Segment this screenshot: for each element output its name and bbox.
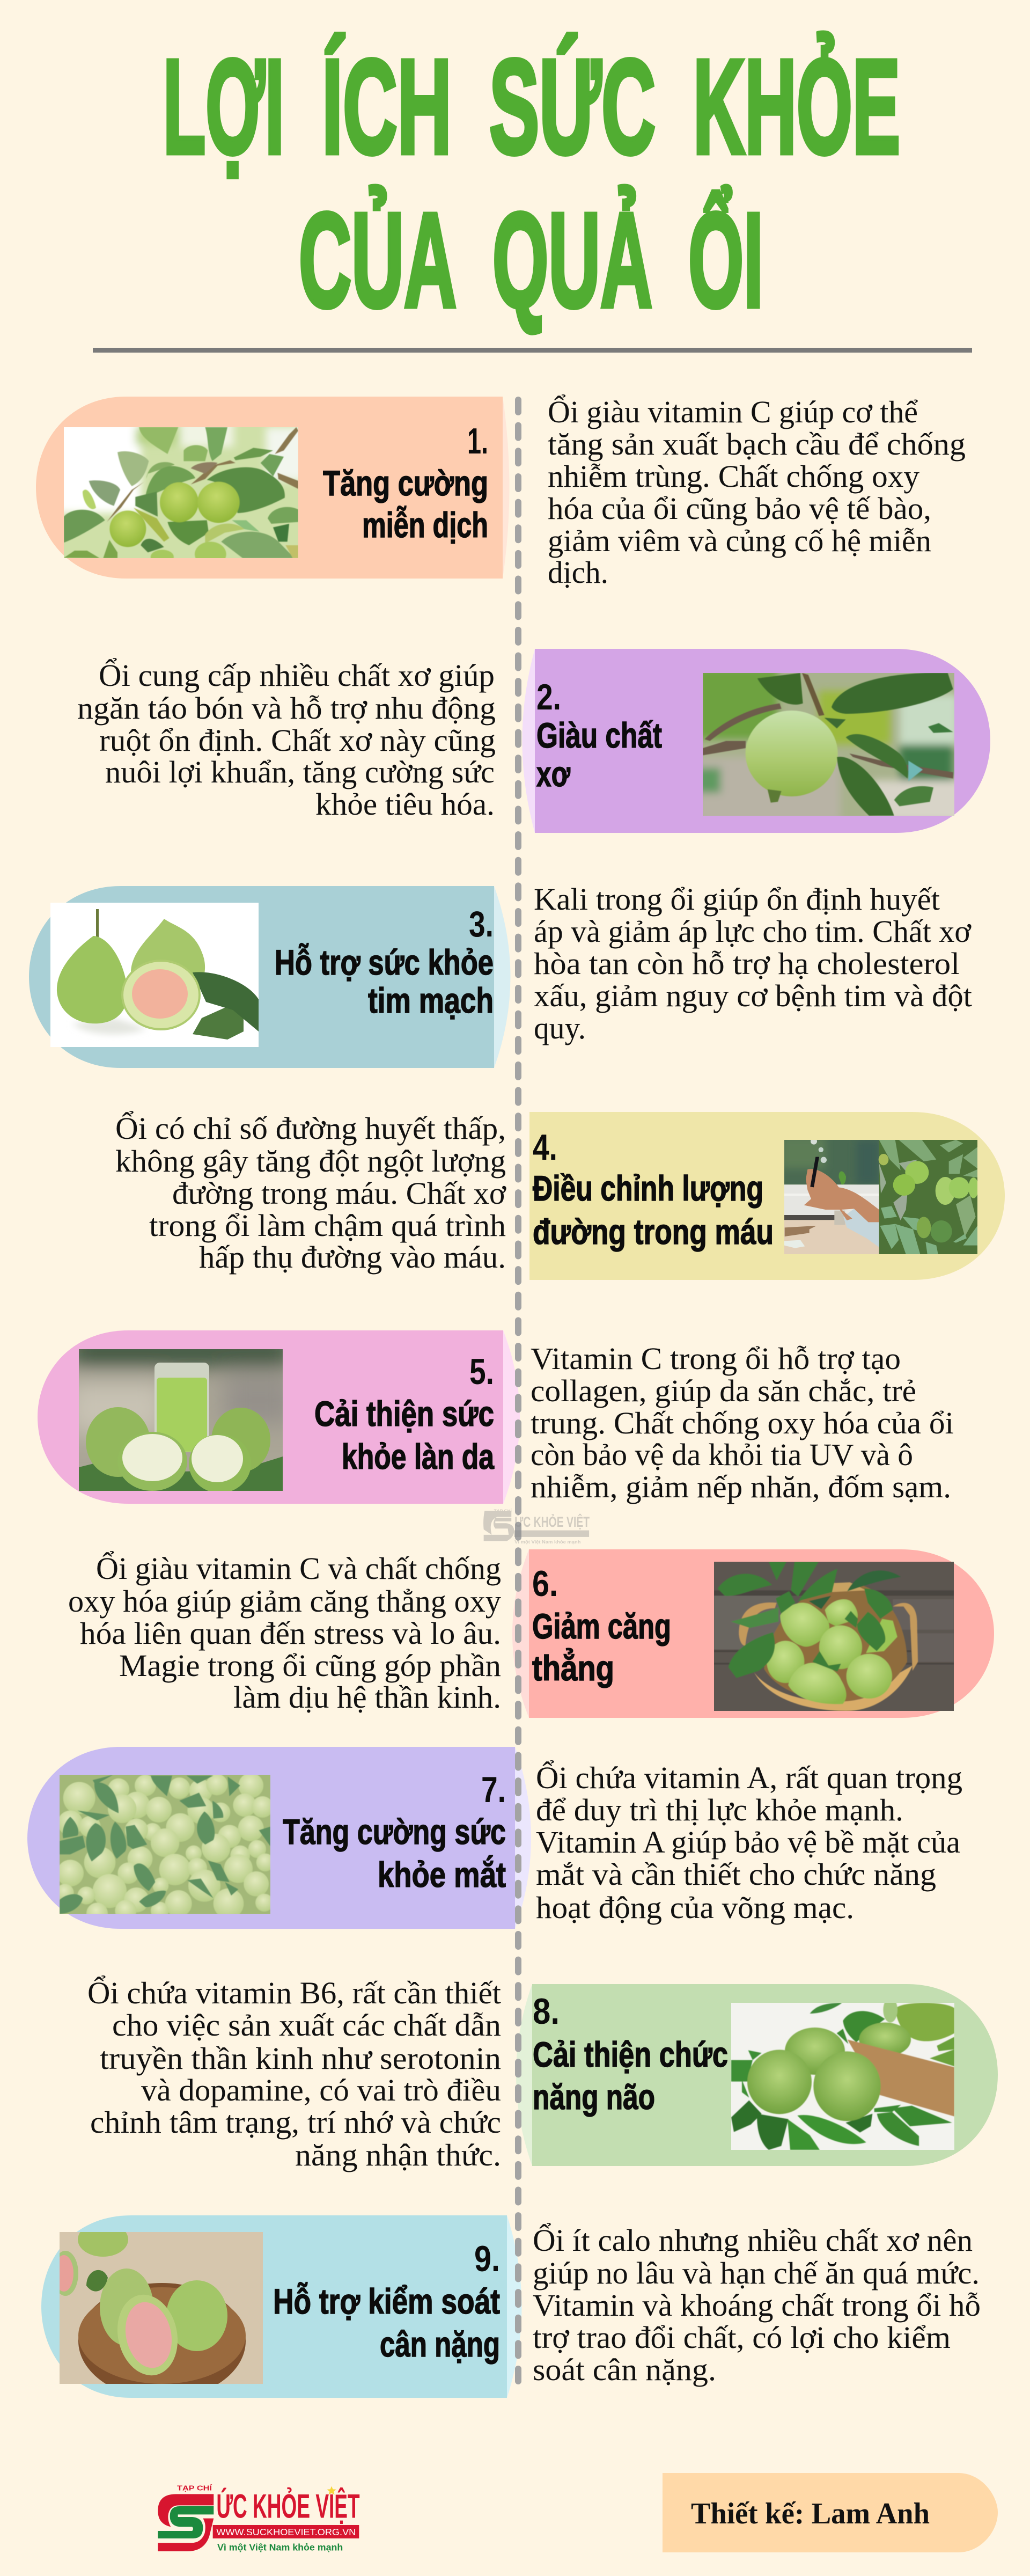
text block 8: và dopamine, có vai trò điều xyxy=(141,2073,501,2107)
watermark logo: ỨC KHỎE VIỆT xyxy=(514,1514,590,1530)
photo: guavas with basket xyxy=(731,2003,954,2150)
text block 1: hóa của ổi cũng bảo vệ tế bào, xyxy=(548,491,931,526)
number and heading: Giàu chất xyxy=(536,715,662,755)
text block 9: giúp no lâu và hạn chế ăn quá mức. xyxy=(533,2256,980,2290)
photo: guava on tree xyxy=(703,673,954,816)
number and heading: Hỗ trợ kiểm soát xyxy=(273,2281,500,2321)
number and heading: 7. xyxy=(481,1769,506,1810)
logo: WWW.SUCKHOEVIET.ORG.VN xyxy=(216,2527,356,2537)
number and heading: 6. xyxy=(532,1563,558,1604)
number and heading: tim mạch xyxy=(368,980,494,1020)
text block 9: Ổi ít calo nhưng nhiều chất xơ nên xyxy=(533,2223,973,2258)
text block 7: hoạt động của võng mạc. xyxy=(536,1890,854,1925)
logo xyxy=(158,2484,360,2553)
number and heading xyxy=(314,1351,495,1476)
text block 4: đường trong máu. Chất xơ xyxy=(172,1176,506,1211)
number and heading xyxy=(273,2238,500,2364)
text block 7: mắt và cần thiết cho chức năng xyxy=(536,1857,936,1892)
number and heading: miễn dịch xyxy=(362,505,488,545)
panel: 4 blood sugar xyxy=(529,1112,1005,1280)
title: SỨC xyxy=(489,32,656,181)
text block 1 xyxy=(548,394,966,590)
number and heading xyxy=(532,1563,671,1688)
panel: 5 skin xyxy=(38,1330,520,1504)
text block 6: oxy hóa giúp giảm căng thẳng oxy xyxy=(68,1584,501,1619)
text block 5: nhiễm, giảm nếp nhăn, đốm sạm. xyxy=(531,1469,951,1504)
panel: 9 weight xyxy=(41,2215,521,2399)
text block 5: collagen, giúp da săn chắc, trẻ xyxy=(531,1373,916,1408)
number and heading: khỏe mắt xyxy=(378,1855,506,1894)
dashed center divider xyxy=(515,400,521,2388)
designer credit: Thiết kế: Lam Anh xyxy=(691,2497,930,2530)
number and heading xyxy=(275,904,494,1020)
watermark logo xyxy=(483,1508,590,1545)
text block 2 xyxy=(77,658,496,822)
number and heading: 3. xyxy=(469,904,494,945)
text block 8: năng nhận thức. xyxy=(295,2138,501,2172)
number and heading: Cải thiện chức xyxy=(533,2035,728,2074)
number and heading xyxy=(533,1127,774,1252)
title xyxy=(163,32,900,335)
number and heading: năng não xyxy=(533,2077,655,2117)
title: CỦA xyxy=(299,185,457,335)
text block 2: Ổi cung cấp nhiều chất xơ giúp xyxy=(99,658,495,693)
text block 3: quy. xyxy=(534,1011,586,1045)
title: QUẢ xyxy=(492,185,652,335)
panel: 3 heart xyxy=(29,886,511,1068)
panel: 7 eyes xyxy=(27,1747,531,1929)
text block 2: khỏe tiêu hóa. xyxy=(315,787,495,822)
text block 8: chỉnh tâm trạng, trí nhớ và chức xyxy=(90,2105,501,2140)
title: ỔI xyxy=(688,185,763,335)
number and heading: 2. xyxy=(536,677,561,718)
text block 1: dịch. xyxy=(548,555,608,590)
text block 5: trung. Chất chống oxy hóa của ổi xyxy=(531,1406,954,1440)
text block 7 xyxy=(536,1760,962,1925)
logo: Vì một Việt Nam khỏe mạnh xyxy=(217,2542,343,2553)
number and heading: cân nặng xyxy=(380,2324,500,2364)
text block 5 xyxy=(531,1341,954,1504)
text block 2: ruột ổn định. Chất xơ này cũng xyxy=(99,723,496,758)
text block 6: hóa liên quan đến stress và lo âu. xyxy=(80,1616,501,1651)
text block 8: cho việc sản xuất các chất dẫn xyxy=(112,2008,501,2043)
text block 4 xyxy=(115,1111,506,1275)
text block 4: Ổi có chỉ số đường huyết thấp, xyxy=(115,1111,506,1146)
number and heading: Điều chỉnh lượng xyxy=(533,1168,763,1208)
text block 8 xyxy=(87,1975,501,2172)
number and heading: 9. xyxy=(474,2238,500,2279)
text block 8: truyền thần kinh như serotonin xyxy=(100,2041,501,2076)
text block 3: áp và giảm áp lực cho tim. Chất xơ xyxy=(534,914,972,949)
number and heading xyxy=(283,1769,506,1894)
number and heading: đường trong máu xyxy=(533,1212,774,1252)
text block 6 xyxy=(68,1551,501,1715)
text block 3: xấu, giảm nguy cơ bệnh tim và đột xyxy=(534,978,972,1013)
photo: guava juice xyxy=(79,1349,283,1491)
text block 6: Ổi giàu vitamin C và chất chống xyxy=(96,1551,501,1586)
title: ÍCH xyxy=(322,32,452,181)
watermark logo: Vì một Việt Nam khỏe mạnh xyxy=(514,1540,581,1545)
number and heading: xơ xyxy=(536,754,570,794)
photo: pile of guavas xyxy=(60,1775,270,1914)
text block 1: giảm viêm và củng cố hệ miễn xyxy=(548,523,931,558)
designer credit xyxy=(663,2473,998,2552)
text block 3: hòa tan còn hỗ trợ hạ cholesterol xyxy=(534,946,960,981)
text block 6: Magie trong ổi cũng góp phần xyxy=(119,1648,501,1683)
photo: guava basket xyxy=(714,1562,954,1711)
number and heading: khỏe làn da xyxy=(342,1437,495,1476)
number and heading: thẳng xyxy=(532,1648,614,1688)
text block 3: Kali trong ổi giúp ổn định huyết xyxy=(534,882,940,917)
photo: glucose test and guava tree xyxy=(784,1140,977,1254)
number and heading: 5. xyxy=(469,1351,494,1392)
text block 4: hấp thụ đường vào máu. xyxy=(199,1240,506,1275)
number and heading: Cải thiện sức xyxy=(314,1394,494,1433)
text block 6: làm dịu hệ thần kinh. xyxy=(233,1680,501,1715)
photo: guava on wooden board xyxy=(60,2232,263,2384)
panel: 1 immune boost xyxy=(36,397,510,579)
number and heading: 4. xyxy=(533,1127,557,1168)
text block 5: Vitamin C trong ổi hỗ trợ tạo xyxy=(531,1341,901,1376)
text block 4: trong ổi làm chậm quá trình xyxy=(149,1208,506,1243)
text block 9 xyxy=(533,2223,981,2387)
number and heading: Tăng cường xyxy=(323,463,488,503)
number and heading: 1. xyxy=(467,421,488,462)
logo: ỨC KHỎE VIỆT xyxy=(216,2487,360,2525)
text block 4: không gây tăng đột ngột lượng xyxy=(115,1144,506,1179)
number and heading: Hỗ trợ sức khỏe xyxy=(275,942,494,982)
number and heading xyxy=(323,421,488,545)
number and heading xyxy=(536,677,662,794)
text block 3 xyxy=(534,882,972,1045)
text block 2: ngăn táo bón và hỗ trợ nhu động xyxy=(77,691,496,726)
number and heading: Tăng cường sức xyxy=(283,1812,506,1851)
text block 7: Ổi chứa vitamin A, rất quan trọng xyxy=(536,1760,962,1795)
text block 1: Ổi giàu vitamin C giúp cơ thể xyxy=(548,394,918,429)
watermark logo: TẠP CHÍ xyxy=(494,1508,512,1513)
text block 9: soát cân nặng. xyxy=(533,2352,716,2387)
text block 9: Vitamin và khoáng chất trong ổi hỗ xyxy=(533,2288,981,2323)
text block 7: để duy trì thị lực khỏe mạnh. xyxy=(536,1792,903,1827)
photo: guava branch xyxy=(64,427,298,558)
text block 1: tăng sản xuất bạch cầu để chống xyxy=(548,427,966,462)
number and heading xyxy=(533,1991,728,2117)
photo: guavas on white xyxy=(50,903,259,1047)
text block 7: Vitamin A giúp bảo vệ bề mặt của xyxy=(536,1825,960,1860)
panel: 6 stress xyxy=(512,1549,994,1718)
text block 5: còn bảo vệ da khỏi tia UV và ô xyxy=(531,1437,913,1472)
text block 9: trợ trao đổi chất, có lợi cho kiểm xyxy=(533,2320,951,2355)
panel: 8 brain xyxy=(516,1984,998,2166)
text block 1: nhiễm trùng. Chất chống oxy xyxy=(548,459,919,494)
logo: TẠP CHÍ xyxy=(177,2484,212,2492)
number and heading: Giảm căng xyxy=(532,1606,671,1646)
text block 2: nuôi lợi khuẩn, tăng cường sức xyxy=(105,755,495,789)
number and heading: 8. xyxy=(533,1991,560,2032)
title: LỢI xyxy=(163,32,284,181)
panel: 2 fiber xyxy=(523,649,990,833)
text block 8: Ổi chứa vitamin B6, rất cần thiết xyxy=(87,1975,501,2010)
